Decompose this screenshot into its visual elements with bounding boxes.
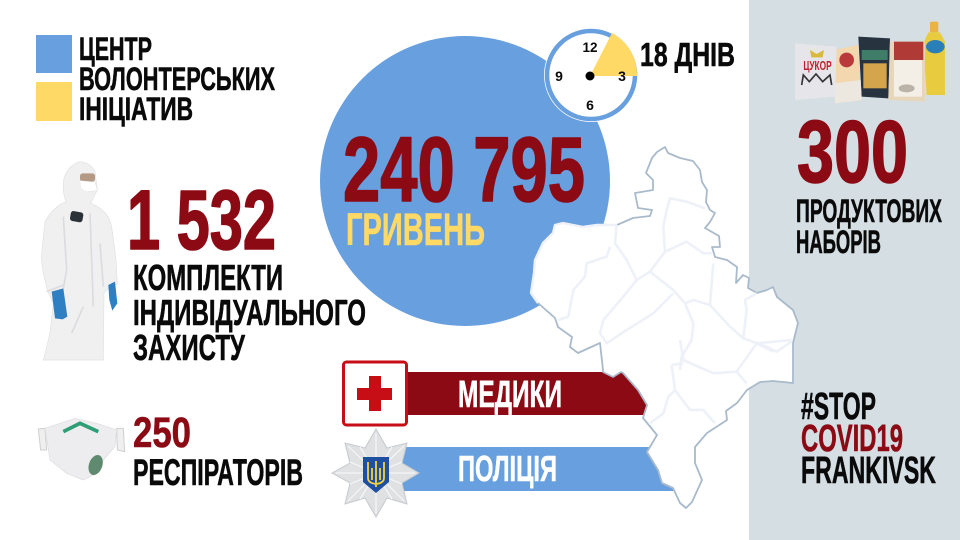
medics label: МЕДИКИ [458,374,562,416]
total amount number: 240 795 [343,119,585,221]
kits number: 1 532 [127,173,276,267]
logo flag: blue square [36,35,72,73]
respirators caption: РЕСПІРАТОРІВ [133,452,303,493]
kits caption line 3: ЗАХИСТУ [133,327,245,368]
right glove [108,282,117,311]
panel: right sidebar [749,0,960,540]
left glove [52,288,67,319]
sugar pack: ЦУКОР [803,59,832,73]
clock yellow wedge [590,33,637,76]
icon: clock: 9 [555,68,563,84]
sugar pack [795,43,837,100]
icon: police star [332,429,419,517]
hashtag line 1: #STOP [801,386,876,428]
police label: ПОЛІЦІЯ [458,448,557,489]
logo flag: yellow square [36,82,72,121]
icon: clock: 6 [586,97,594,113]
suit badge [70,211,84,223]
hashtag line 2: COVID19 [801,418,903,460]
respirators number: 250 [133,409,191,457]
food kits number: 300 [797,102,908,201]
goggles and face mask [80,173,97,192]
duration label: 18 ДНІВ [640,36,735,73]
icon: red cross box [344,362,406,425]
respirator photo [38,418,125,480]
food kits caption line 2: НАБОРІВ [796,224,881,260]
kits caption line 1: КОМПЛЕКТИ [133,257,283,298]
logo text line 1: ЦЕНТР [79,31,152,67]
big blue circle [320,36,610,326]
map of Ivano-Frankivsk region [531,147,798,508]
food products photo [795,22,945,103]
flour pack [888,42,925,102]
ribbon: medics bar [400,372,660,415]
shield with trident [363,457,389,493]
icon: clock: 3 [618,68,626,84]
logo text line 3: ІНІЦІАТИВ [79,91,193,127]
icon: clock: 12 [582,40,598,55]
kits caption line 2: ІНДИВІДУАЛЬНОГО [133,292,366,333]
currency label: ГРИВЕНЬ [346,204,485,255]
logo text line 2: ВОЛОНТЕРСЬКИХ [79,61,275,97]
respirator valve [86,453,105,477]
logo: volunteer initiatives centre [36,31,275,127]
cereal pack [833,45,862,103]
ribbon: police bar [395,447,685,491]
pasta pack [858,37,890,98]
oil bottle [923,22,945,95]
icon: clock [544,28,638,122]
protective suit photo [42,162,117,360]
